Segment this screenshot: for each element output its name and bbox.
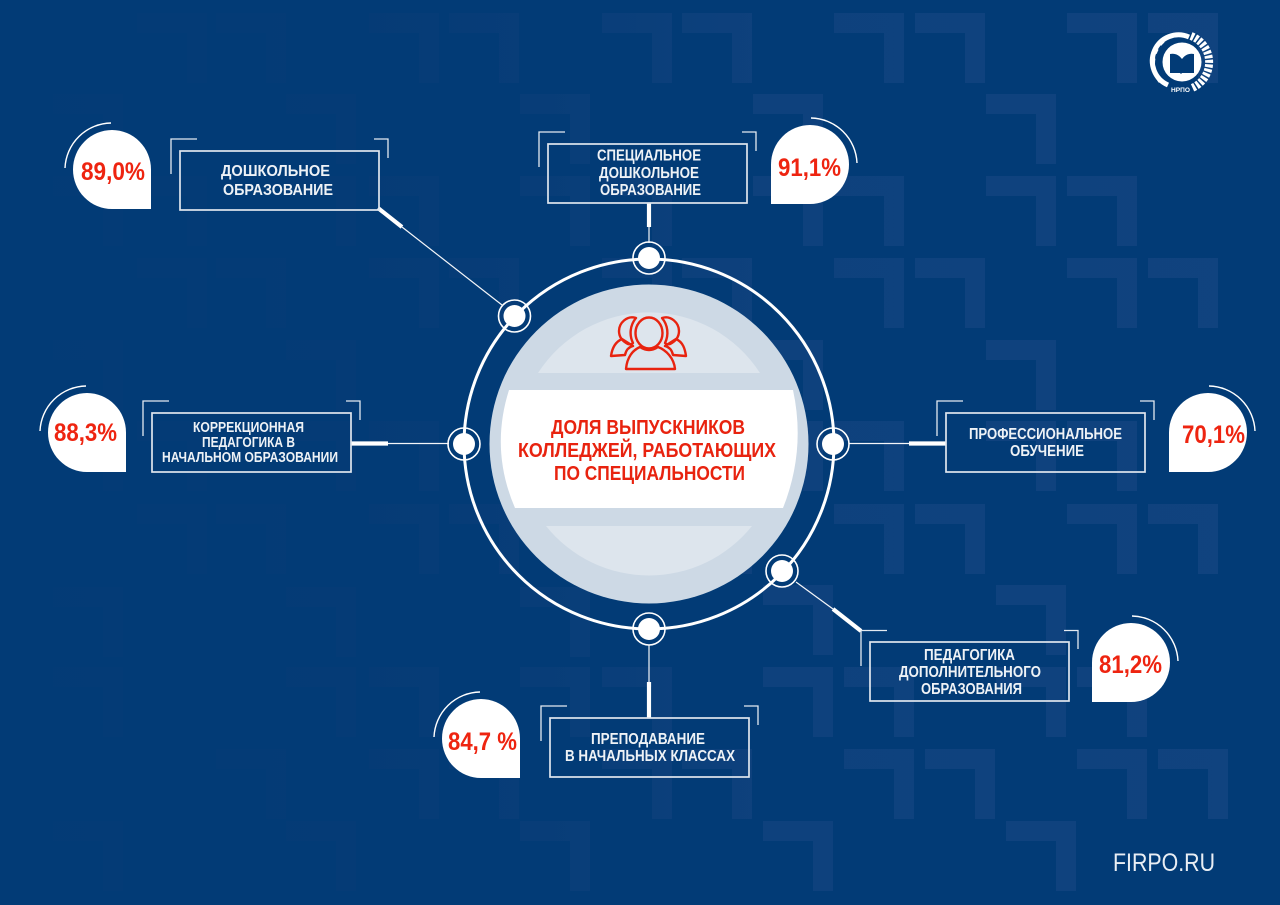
label box — [937, 401, 1154, 472]
value bubble 89,0% — [65, 123, 151, 209]
value bubble 81,2% — [1092, 616, 1178, 702]
white title band — [501, 390, 798, 508]
panel: additional education pedagogy — [861, 616, 1178, 702]
label box — [171, 139, 388, 210]
label box: ОБРАЗОВАНИЕ — [223, 182, 333, 199]
panel: preschool education — [65, 123, 388, 210]
panel: correctional pedagogy — [40, 386, 360, 472]
top lighter segment — [538, 312, 760, 373]
value bubble 84,7 % — [434, 692, 520, 778]
disc: light background — [490, 284, 808, 604]
connector: primary school teaching — [648, 645, 650, 718]
title — [518, 417, 777, 485]
label box — [539, 132, 756, 203]
label box: ОБУЧЕНИЕ — [1010, 443, 1084, 460]
node: top — [633, 242, 665, 274]
node: lower right — [766, 555, 798, 587]
value bubble 89,0%: 89,0% — [81, 158, 145, 186]
central diagram — [464, 259, 834, 629]
connector: additional education — [796, 582, 861, 631]
label box: ОБРАЗОВАНИЕ — [600, 182, 701, 199]
label box — [143, 401, 360, 472]
value bubble 70,1%: 70,1% — [1182, 421, 1245, 449]
panel: vocational training — [937, 386, 1255, 472]
label box: ПРЕПОДАВАНИЕ — [591, 731, 705, 748]
panel: primary school teaching — [434, 692, 758, 778]
node: upper left — [498, 300, 530, 332]
label box: ДОПОЛНИТЕЛЬНОГО — [899, 664, 1041, 681]
value bubble 91,1%: 91,1% — [778, 154, 841, 182]
value bubble 88,3%: 88,3% — [54, 419, 117, 447]
connector: correctional pedagogy — [351, 442, 449, 444]
label box: ОБРАЗОВАНИЯ — [921, 681, 1022, 698]
value bubble 88,3% — [40, 386, 126, 472]
value bubble 81,2%: 81,2% — [1099, 651, 1162, 679]
label box: ДОШКОЛЬНОЕ — [221, 163, 330, 180]
label box: В НАЧАЛЬНЫХ КЛАССАХ — [565, 748, 736, 765]
label box: ДОШКОЛЬНОЕ — [599, 165, 699, 182]
icon: organisation logo — [1152, 35, 1209, 94]
label box: НАЧАЛЬНОМ ОБРАЗОВАНИИ — [162, 450, 338, 466]
icon: group of people — [611, 317, 686, 369]
bottom lighter segment — [546, 526, 752, 575]
connector: special preschool education — [648, 203, 650, 243]
label box — [541, 706, 758, 777]
connector: vocational training — [849, 442, 946, 444]
title: КОЛЛЕДЖЕЙ, РАБОТАЮЩИХ — [518, 438, 777, 462]
website address: FIRPO.RU — [1113, 849, 1215, 877]
panel: special preschool education — [539, 118, 857, 204]
label box: ПЕДАГОГИКА В — [202, 435, 295, 451]
label box: СПЕЦИАЛЬНОЕ — [597, 148, 701, 164]
outer ring — [464, 259, 834, 629]
node: bottom — [633, 613, 665, 645]
node: left — [448, 428, 480, 460]
node: right — [817, 428, 849, 460]
value bubble 84,7 %: 84,7 % — [448, 728, 517, 756]
value bubble 91,1% — [771, 118, 857, 204]
value bubble 70,1% — [1169, 386, 1255, 472]
connector: preschool education — [378, 208, 502, 305]
label box: КОРРЕКЦИОННАЯ — [193, 420, 304, 436]
label box: ПЕДАГОГИКА — [924, 647, 1015, 664]
label box — [861, 630, 1078, 701]
title: ПО СПЕЦИАЛЬНОСТИ — [554, 463, 745, 485]
label box: ПРОФЕССИОНАЛЬНОЕ — [969, 426, 1122, 443]
title: ДОЛЯ ВЫПУСКНИКОВ — [551, 417, 745, 439]
icon: organisation logo: НРПО — [1171, 88, 1190, 94]
